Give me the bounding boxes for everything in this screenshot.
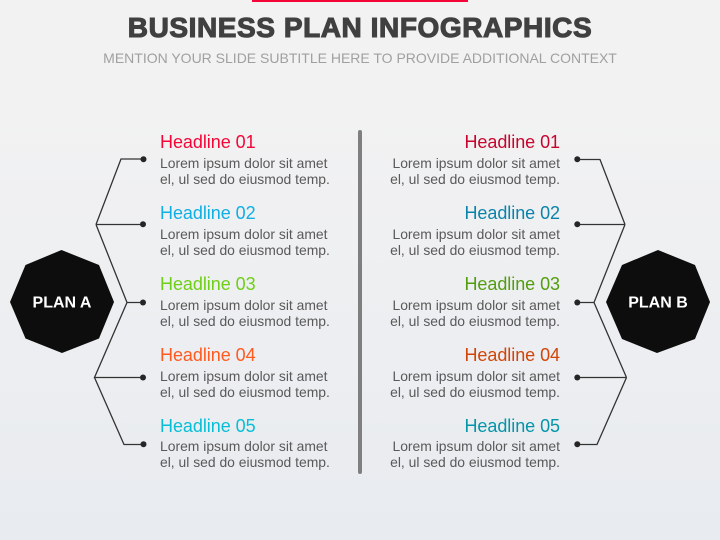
right item 3: Lorem ipsum dolor sit amet [392, 297, 560, 313]
left item 1: Headline 01 [160, 132, 256, 152]
title: BUSINESS PLAN INFOGRAPHICS [128, 12, 592, 43]
subtitle: MENTION YOUR SLIDE SUBTITLE HERE TO PROVIDE ADDITIONAL CONTEXT [103, 50, 617, 66]
central divider [358, 130, 362, 474]
connector diagram: plan B [574, 156, 628, 448]
left item 2 [160, 203, 330, 258]
left item 3 [160, 274, 330, 329]
right item 3: Headline 03 [464, 274, 560, 294]
right item 2: Lorem ipsum dolor sit amet [392, 226, 560, 242]
right item 2: el, ul sed do eiusmod temp. [390, 242, 560, 258]
left item 5 [160, 416, 330, 470]
plan B badge: PLAN B [628, 294, 688, 312]
right item 5 [390, 416, 560, 470]
right item 4: el, ul sed do eiusmod temp. [390, 384, 560, 400]
right item 1: el, ul sed do eiusmod temp. [390, 171, 560, 187]
right item 4: Lorem ipsum dolor sit amet [392, 368, 560, 384]
left item 1 [160, 132, 330, 187]
right item 4 [390, 345, 560, 400]
left item 3: Lorem ipsum dolor sit amet [160, 297, 328, 313]
left item 5: Lorem ipsum dolor sit amet [160, 438, 328, 454]
plan A badge [10, 250, 114, 353]
right item 5: el, ul sed do eiusmod temp. [390, 454, 560, 470]
right item 2 [390, 203, 560, 258]
left item 2: Lorem ipsum dolor sit amet [160, 226, 328, 242]
left item 1: Lorem ipsum dolor sit amet [160, 155, 328, 171]
left item 5: el, ul sed do eiusmod temp. [160, 454, 330, 470]
right item 1 [390, 132, 560, 187]
left item 5: Headline 05 [160, 416, 256, 436]
connector diagram: plan A [94, 156, 146, 448]
right item 5: Headline 05 [464, 416, 560, 436]
right item 3: el, ul sed do eiusmod temp. [390, 313, 560, 329]
left item 3: el, ul sed do eiusmod temp. [160, 313, 330, 329]
right item 5: Lorem ipsum dolor sit amet [392, 438, 560, 454]
top accent bar [252, 0, 468, 2]
left item 1: el, ul sed do eiusmod temp. [160, 171, 330, 187]
left item 4: Lorem ipsum dolor sit amet [160, 368, 328, 384]
right item 4: Headline 04 [464, 345, 560, 365]
left item 4: Headline 04 [160, 345, 256, 365]
right item 2: Headline 02 [464, 203, 560, 223]
plan A badge: PLAN A [33, 294, 92, 312]
left item 4 [160, 345, 330, 400]
left item 2: Headline 02 [160, 203, 256, 223]
right item 1: Lorem ipsum dolor sit amet [392, 155, 560, 171]
left item 3: Headline 03 [160, 274, 256, 294]
left item 2: el, ul sed do eiusmod temp. [160, 242, 330, 258]
right item 1: Headline 01 [464, 132, 560, 152]
plan B badge [606, 250, 710, 353]
left item 4: el, ul sed do eiusmod temp. [160, 384, 330, 400]
right item 3 [390, 274, 560, 329]
